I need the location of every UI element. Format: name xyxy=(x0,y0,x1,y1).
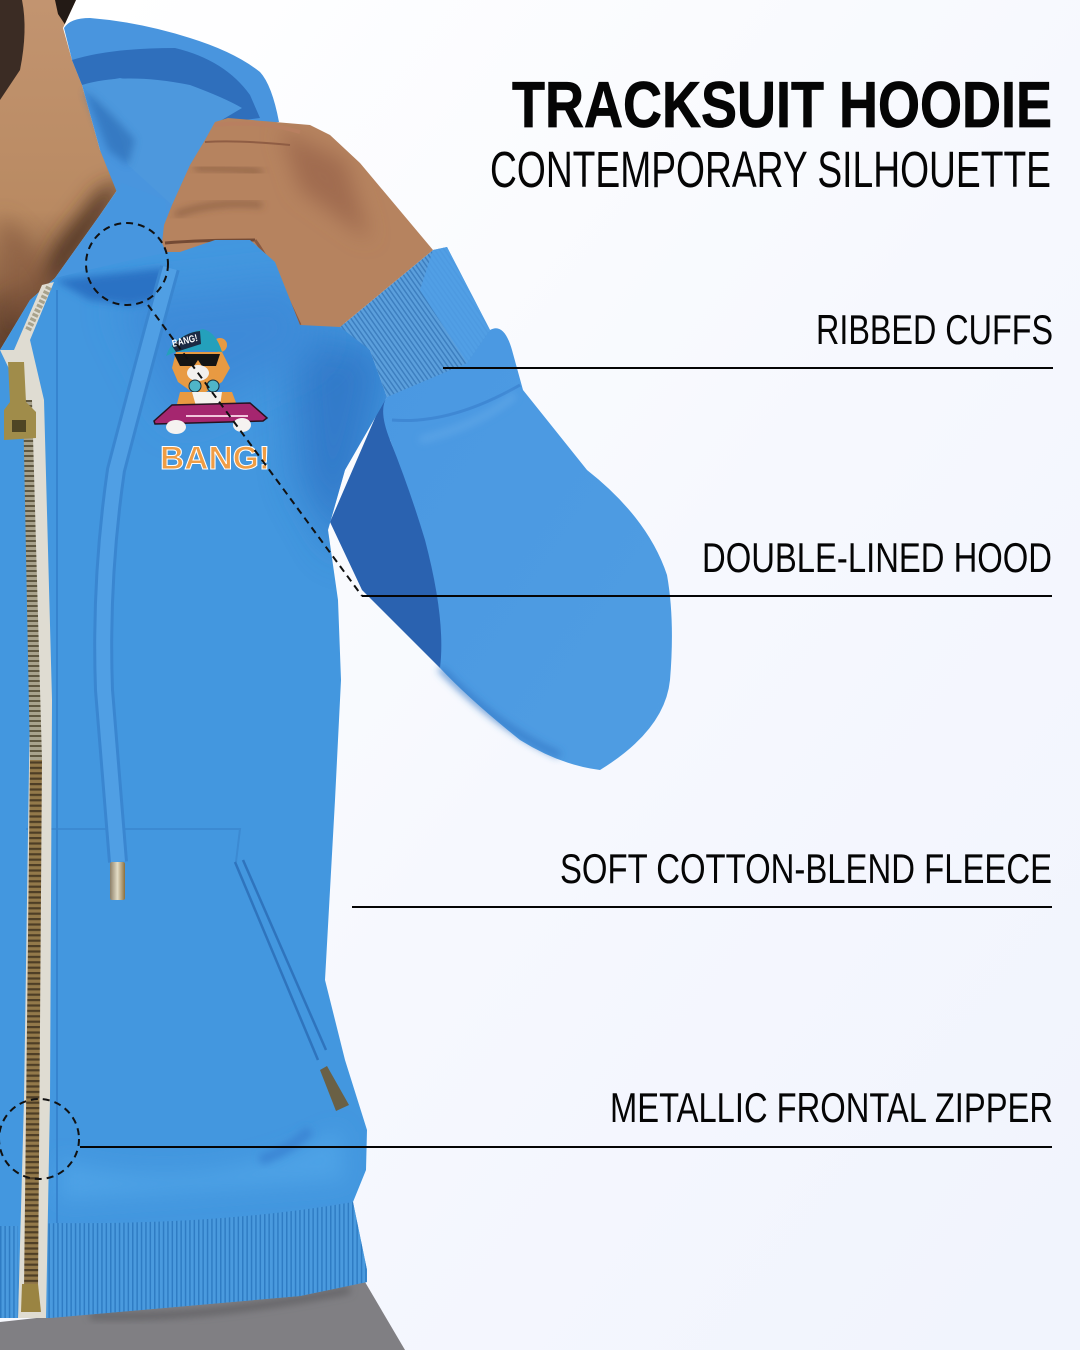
hood inner fold xyxy=(82,78,242,205)
BANG logotype: BANG! xyxy=(160,440,270,476)
hood dark lining xyxy=(72,48,260,124)
upper zip slant xyxy=(28,285,50,330)
pocket opening xyxy=(235,860,326,1060)
hand xyxy=(162,118,433,327)
embroidered tiger logo xyxy=(154,329,270,476)
drawstring metal tip xyxy=(110,862,125,900)
DJ deck xyxy=(154,403,267,424)
drawstring xyxy=(103,268,170,900)
tiger head xyxy=(172,352,230,392)
ribbed hem xyxy=(0,1202,367,1318)
zipper pull on pocket xyxy=(320,1066,349,1111)
tiger muzzle xyxy=(187,365,209,381)
ribbed cuff xyxy=(340,247,490,397)
zipper pull xyxy=(4,362,36,440)
dashed leader line xyxy=(148,305,362,596)
tiger ears xyxy=(213,338,227,352)
zipper stop xyxy=(21,1284,41,1312)
tiger feet xyxy=(166,420,186,434)
zipper tape xyxy=(0,282,54,1318)
pocket seam xyxy=(0,829,240,862)
hoodie sleeve underside xyxy=(330,395,480,668)
hoodie sleeve xyxy=(383,328,672,770)
metallic zipper xyxy=(0,282,54,1318)
placket seams xyxy=(12,290,57,1225)
callout: zipper circle xyxy=(0,1099,79,1179)
tiger cap xyxy=(166,329,222,356)
hoodie body xyxy=(0,235,390,1318)
grey pants xyxy=(0,1282,405,1350)
headphones xyxy=(189,380,219,392)
tiger body xyxy=(176,392,238,408)
embroidered tiger logo: BANG! xyxy=(171,333,199,350)
hood xyxy=(64,18,279,232)
zipper teeth upper xyxy=(23,400,42,760)
zipper teeth lower xyxy=(24,760,42,1290)
callout: hood circle xyxy=(86,223,168,305)
model neck and beard xyxy=(0,0,125,360)
tiger sunglasses xyxy=(174,354,220,366)
collar xyxy=(55,183,172,278)
